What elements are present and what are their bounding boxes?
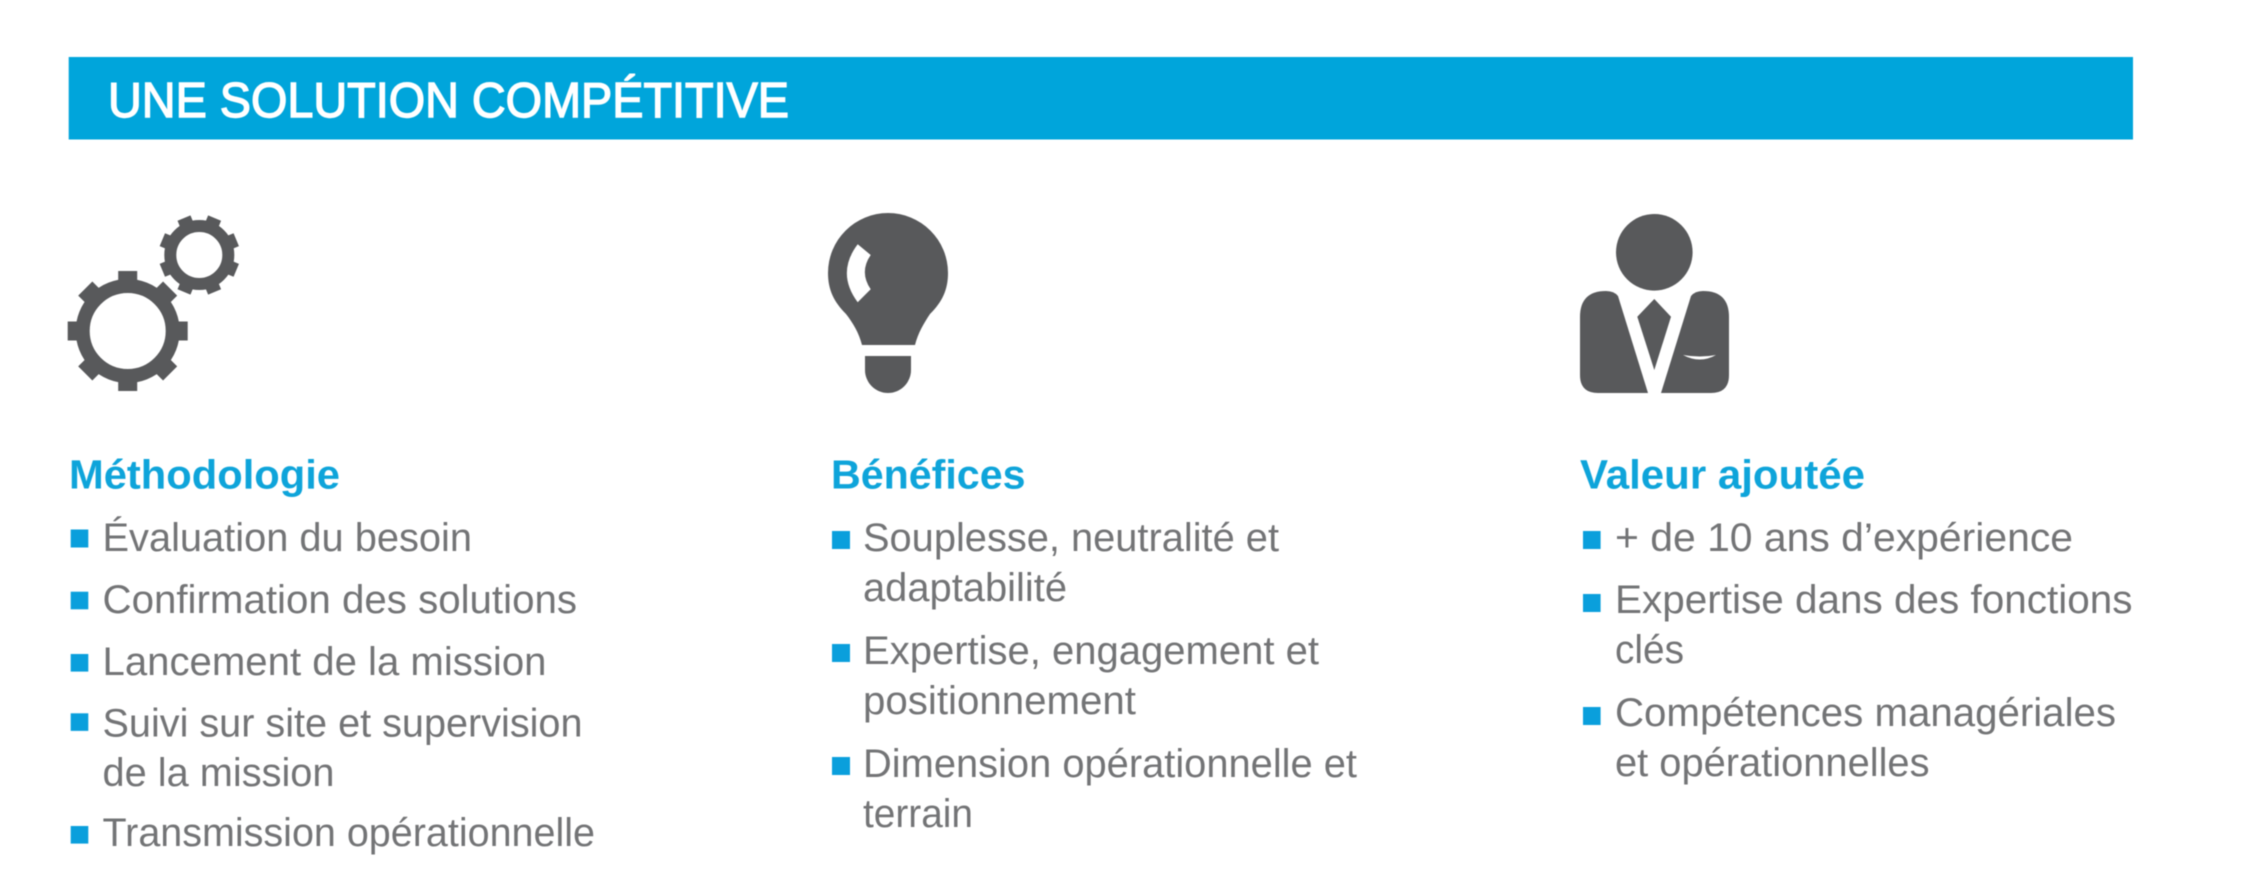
list: bénéfices: Souplesse, neutralité et [863, 516, 1279, 560]
list: valeur ajoutée: et opérationnelles [1615, 741, 1930, 785]
icon: light bulb [828, 213, 948, 393]
icon: person in suit [1580, 214, 1729, 393]
title banner [69, 57, 2133, 140]
panel: Bénéfices [828, 213, 1357, 836]
list: valeur ajoutée: Compétences managériales [1615, 691, 2116, 735]
list: méthodologie: Lancement de la mission [102, 640, 546, 684]
list: méthodologie: Transmission opérationnelle [102, 811, 595, 855]
panel: Méthodologie [68, 215, 595, 855]
list: bénéfices: adaptabilité [863, 566, 1067, 610]
list: méthodologie [71, 515, 595, 855]
list: valeur ajoutée: + de 10 ans d’expérience [1615, 516, 2073, 560]
heading: Valeur ajoutée: Valeur ajoutée [1580, 452, 1865, 498]
title banner: UNE SOLUTION COMPÉTITIVE [108, 74, 789, 128]
list: bénéfices: Expertise, engagement et [863, 629, 1319, 673]
list: valeur ajoutée: clés [1615, 628, 1684, 672]
heading: Méthodologie: Méthodologie [69, 452, 340, 498]
icon: gears [68, 215, 239, 391]
heading: Bénéfices: Bénéfices [831, 452, 1026, 498]
list: valeur ajoutée: Expertise dans des fonctions [1615, 578, 2132, 622]
list: bénéfices [832, 516, 1357, 836]
list: méthodologie: Suivi sur site et supervision [102, 702, 582, 746]
list: bénéfices: terrain [863, 792, 973, 836]
panel: Valeur ajoutée [1580, 214, 2132, 785]
list: méthodologie: Confirmation des solutions [102, 578, 577, 622]
list: bénéfices: Dimension opérationnelle et [863, 742, 1357, 786]
list: bénéfices: positionnement [863, 679, 1136, 723]
list: valeur ajoutée [1583, 516, 2132, 785]
list: méthodologie: de la mission [102, 751, 334, 795]
list: méthodologie: Évaluation du besoin [102, 515, 472, 560]
